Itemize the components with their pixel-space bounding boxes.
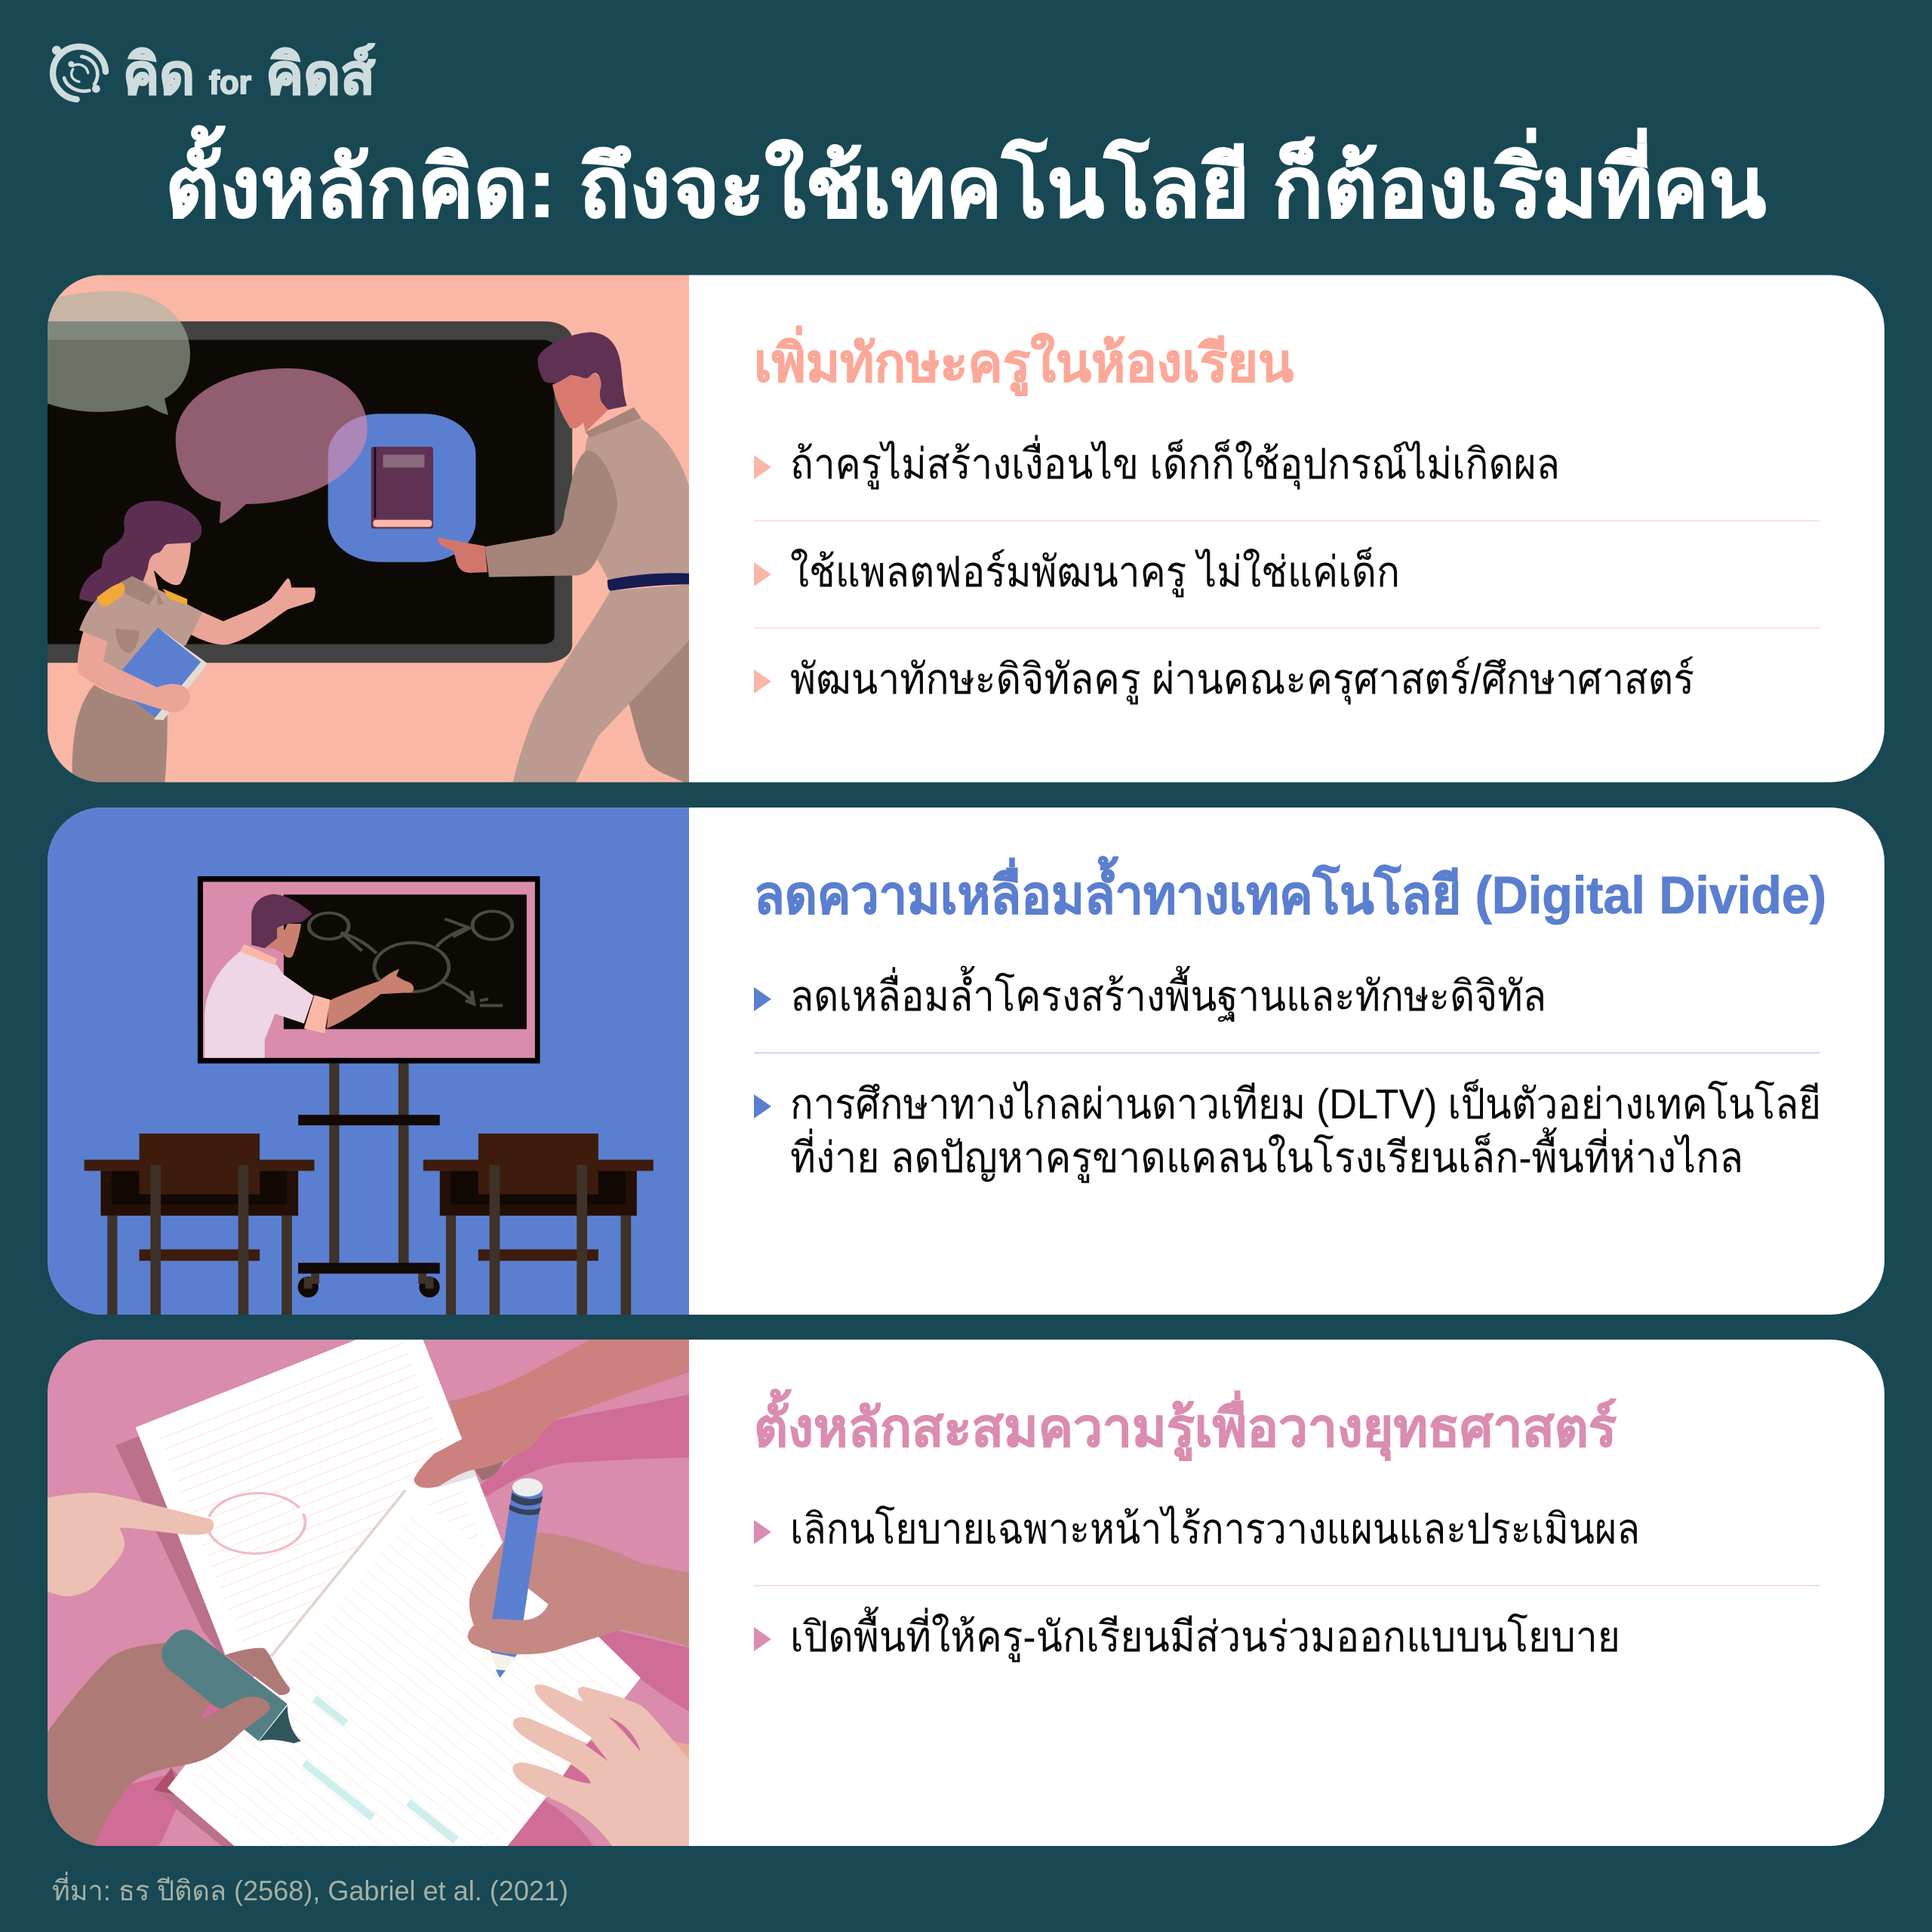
panel: digital divide xyxy=(45,808,1884,1321)
desk left xyxy=(85,1134,315,1321)
card background xyxy=(48,808,1884,1315)
source footnote: ที่มา: ธร ปีติดล (2568), Gabriel et al. (2021) xyxy=(52,1871,568,1906)
icon: book tile xyxy=(328,414,475,562)
stand xyxy=(298,1063,440,1297)
card background xyxy=(48,275,1884,782)
paper shadow xyxy=(115,1434,227,1663)
man teacher xyxy=(438,332,691,786)
bullet 3: พัฒนาทักษะดิจิทัลครู ผ่านคณะครุศาสตร์/ศึกษาศาสตร์ xyxy=(790,655,1694,705)
illustration: classroom screen xyxy=(45,808,691,1321)
panel: knowledge strategy xyxy=(45,1336,1884,1850)
monitor xyxy=(198,876,540,1063)
hand with pencil xyxy=(467,1478,691,1678)
hand with highlighter xyxy=(45,1629,301,1850)
bullet 1: ถ้าครูไม่สร้างเงื่อนไข เด็กก็ใช้อุปกรณ์ไม่เกิดผล xyxy=(790,435,1560,490)
bullet 2: การศึกษาทางไกลผ่านดาวเทียม (DLTV) เป็นตัวอย่างเทคโนโลยี xyxy=(790,1078,1821,1128)
speech bubble left xyxy=(45,291,190,415)
woman teacher xyxy=(72,501,315,786)
bullet 1: ลดเหลื่อมล้ำโครงสร้างพื้นฐานและทักษะดิจิทัล xyxy=(790,966,1546,1021)
bullet 2 xyxy=(754,1078,1821,1183)
hand pointing left xyxy=(45,1493,214,1596)
hand top right xyxy=(414,1336,691,1488)
bullet 1: เลิกนโยบายเฉพาะหน้าไร้การวางแผนและประเมินผล xyxy=(790,1505,1640,1552)
heading: เพิ่มทักษะครูในห้องเรียน xyxy=(754,325,1294,396)
heading: ตั้งหลักสะสมความรู้เพื่อวางยุทธศาสตร์ xyxy=(754,1389,1617,1461)
bullet 2: ที่ง่าย ลดปัญหาครูขาดแคลนในโรงเรียนเล็ก-พื้นที่ห่างไกล xyxy=(790,1128,1743,1183)
desk right xyxy=(423,1134,654,1321)
logo xyxy=(52,43,376,106)
title: ตั้งหลักคิด: ถึงจะใช้เทคโนโลยี ก็ต้องเริ่มที่คน xyxy=(165,125,1766,235)
bullet 2: ใช้แพลตฟอร์มพัฒนาครู ไม่ใช่แค่เด็ก xyxy=(790,546,1400,598)
icon: logo spiral xyxy=(52,46,106,100)
heading: ลดความเหลื่อมล้ำทางเทคโนโลยี (Digital Divide) xyxy=(754,856,1826,924)
bullet 2: เปิดพื้นที่ให้ครู-นักเรียนมีส่วนร่วมออกแบบนโยบาย xyxy=(790,1607,1620,1663)
logo wordmark: คิด xyxy=(123,43,195,106)
hand bottom right xyxy=(512,1684,691,1850)
logo wordmark: คิดส์ xyxy=(266,43,376,106)
panel: teacher skills xyxy=(20,272,1884,786)
card background xyxy=(48,1340,1884,1846)
illustration: hands on documents xyxy=(48,1340,689,1846)
document xyxy=(136,1340,641,1846)
logo wordmark: for xyxy=(209,64,251,101)
speech bubble centre xyxy=(176,368,368,523)
logo wordmark xyxy=(123,43,376,106)
illustration: teachers at smart board xyxy=(20,272,691,786)
